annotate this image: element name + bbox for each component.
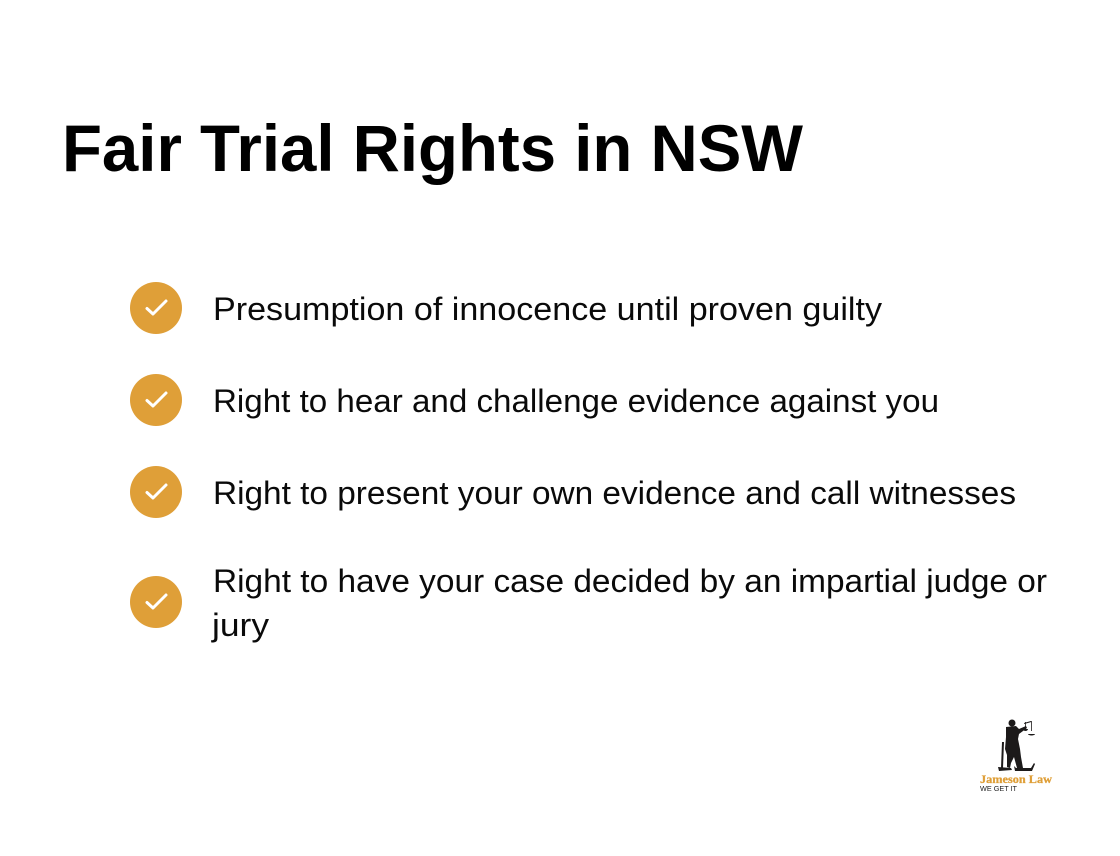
title: Fair Trial Rights in NSW	[62, 111, 804, 185]
text: impartial judge or jury: Right to have your case decided by an impartial judge or	[213, 563, 1047, 599]
text: impartial judge or jury: jury	[211, 607, 269, 643]
text: impartial judge or jury	[211, 563, 1047, 643]
icon: lady justice	[998, 720, 1035, 771]
text: Jameson Law: Jameson Law	[980, 774, 1053, 786]
text: We get it: WE GET IT	[980, 784, 1017, 793]
icon: check badge	[130, 374, 182, 426]
text: present evidence: Right to present your own evidence and call witnesses	[213, 475, 1016, 511]
icon: check badge	[130, 282, 182, 334]
text: presumption: Presumption of innocence until proven guilty	[213, 291, 882, 327]
text: challenge evidence: Right to hear and challenge evidence against you	[213, 383, 939, 419]
list item: challenge evidence	[130, 374, 939, 426]
list item: impartial judge or jury	[130, 563, 1047, 643]
logo: Jameson Law	[980, 720, 1053, 793]
icon: check badge	[130, 576, 182, 628]
list item: presumption of innocence	[130, 282, 882, 334]
checklist	[130, 282, 1047, 643]
list item: present evidence	[130, 466, 1016, 518]
icon: check badge	[130, 466, 182, 518]
